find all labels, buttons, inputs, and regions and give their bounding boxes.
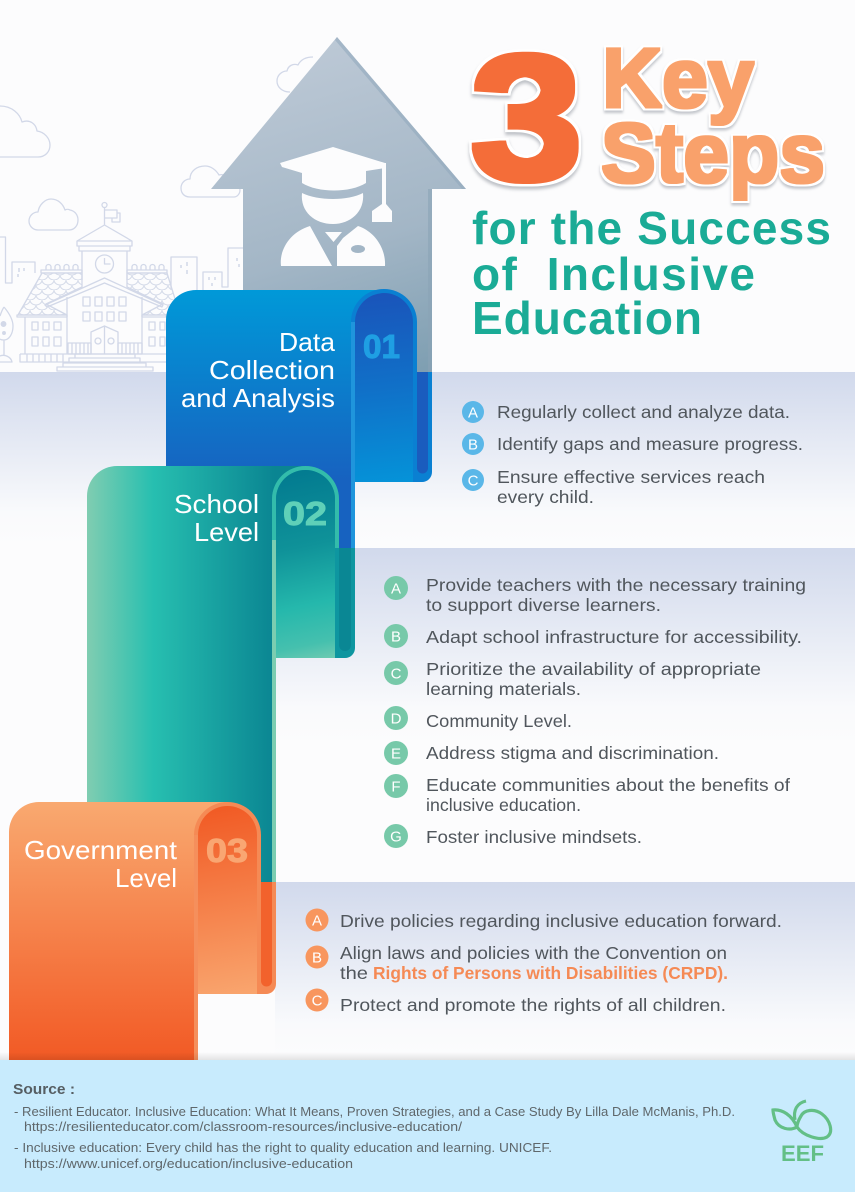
list: step 3 actions: B (312, 950, 322, 966)
list: step 2 actions: Community Level. (426, 711, 572, 731)
list: step 2 actions: Prioritize the availability of appropriate (426, 659, 761, 679)
list: step 2 actions: Educate communities about the benefits of (426, 775, 790, 795)
subtitle: of Inclusive (472, 248, 755, 300)
icon: graduate cap (280, 147, 392, 266)
list: step 3 actions: Protect and promote the rights of all children. (340, 995, 726, 1015)
source references: - Inclusive education: Every child has the right to quality education and learning. UNICEF. (14, 1141, 552, 1155)
title: Steps: Steps (601, 106, 825, 200)
list: step 1 actions: Ensure effective services reach (497, 467, 765, 487)
list: step 2 actions: C (391, 666, 402, 682)
list: step 1 actions: A (468, 404, 478, 422)
subtitle (472, 202, 831, 344)
list: step 2 actions: F (391, 778, 401, 796)
background band: step 1 (0, 372, 855, 548)
list: step 3 actions: Drive policies regarding inclusive education forward. (340, 911, 782, 931)
background band: step 2 (275, 548, 855, 748)
number 02: 02 (283, 495, 327, 532)
heading: ribbon 01 title: and Analysis (181, 383, 335, 413)
source references (14, 1105, 735, 1171)
ribbon 03: Government Level (9, 802, 276, 1060)
heading: ribbon 03 title: Government (24, 835, 178, 865)
list: step 1 actions: B (468, 436, 478, 454)
list: step 2 actions: E (391, 746, 401, 762)
list: step 3 actions: A (312, 912, 322, 930)
logo: EEF butterfly (773, 1101, 831, 1166)
list: step 3 actions: Align laws and policies with the Convention on (340, 943, 727, 963)
logo: EEF butterfly: EEF (781, 1141, 824, 1166)
heading: ribbon 01 title: Collection (209, 355, 335, 385)
list: step 3 actions: the (340, 963, 368, 983)
source references: - Resilient Educator. Inclusive Education: What It Means, Proven Strategies, and a Case Study By Lilla Dale McManis, Ph.D. (14, 1105, 735, 1119)
number 01: 01 (363, 328, 400, 365)
icon: house arrow with graduate (211, 37, 466, 372)
source references: https://resilienteducator.com/classroom-resources/inclusive-education/ (24, 1120, 463, 1134)
ribbon 02: School Level (87, 466, 355, 882)
subtitle: Education (472, 292, 702, 344)
number 03: 03 (206, 832, 248, 869)
list: step 2 actions: A (391, 580, 401, 598)
subtitle: for the Success (472, 202, 831, 254)
list: step 2 actions: B (391, 628, 401, 646)
list: step 2 actions: learning materials. (426, 679, 581, 699)
list: step 2 actions: to support diverse learners. (426, 595, 661, 615)
source references: https://www.unicef.org/education/inclusive-education (24, 1157, 353, 1171)
list: step 1 actions: every child. (497, 487, 594, 507)
ribbon 01: Data Collection and Analysis (166, 289, 432, 548)
title: 3: 3 (470, 18, 583, 217)
icon: badge on gown (351, 245, 365, 253)
footer panel: sources (0, 1052, 855, 1192)
heading: ribbon 01 title (181, 327, 336, 413)
list: step 1 actions: Identify gaps and measure progress. (497, 434, 803, 454)
list: step 2 actions (384, 575, 806, 848)
list: step 2 actions: Foster inclusive mindsets. (426, 827, 642, 847)
heading: ribbon 03 title: Level (115, 863, 177, 893)
heading: ribbon 01 title: Data (279, 327, 336, 357)
heading: Source: Source : (13, 1081, 75, 1098)
list: step 3 actions: C (312, 992, 323, 1010)
list: step 3 actions (306, 908, 782, 1015)
heading: ribbon 02 title: School (174, 489, 259, 519)
list: step 2 actions: G (390, 828, 402, 846)
list: step 2 actions: inclusive education. (426, 795, 581, 815)
heading: ribbon 02 title: Level (194, 517, 259, 547)
list: step 1 actions: Regularly collect and analyze data. (497, 402, 790, 422)
list: step 1 actions: C (468, 472, 479, 490)
list: step 2 actions: Address stigma and discrimination. (426, 743, 719, 763)
title: Key: Key (602, 31, 754, 125)
heading: ribbon 02 title (174, 489, 259, 547)
list: step 1 actions (462, 401, 803, 507)
background band: step 3 (275, 882, 855, 1060)
illustration: school and clouds line art (0, 57, 313, 371)
list: step 3 actions: Rights of Persons with Disabilities (CRPD). (373, 963, 728, 983)
list: step 2 actions: Adapt school infrastructure for accessibility. (426, 627, 802, 647)
list: step 2 actions: D (391, 710, 402, 728)
heading: ribbon 03 title (24, 835, 178, 893)
list: step 2 actions: Provide teachers with the necessary training (426, 575, 806, 595)
